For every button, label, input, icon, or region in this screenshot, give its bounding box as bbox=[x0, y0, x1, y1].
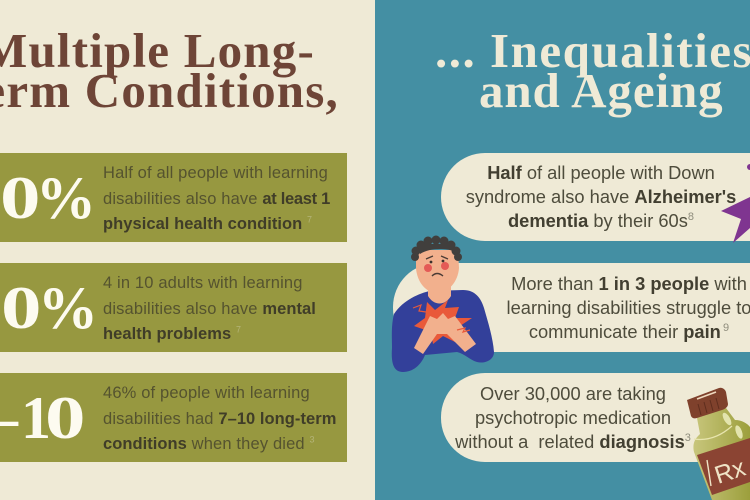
label text Rx: Rx bbox=[711, 453, 749, 490]
heading: inequalities and ageing: and Ageing bbox=[479, 63, 724, 118]
stat number: 40%: % bbox=[38, 275, 98, 341]
panel: inequalities and ageing bbox=[375, 0, 750, 500]
callout text: without a related diagnosis3 bbox=[455, 431, 691, 452]
stat description: disabilities also have mental bbox=[103, 300, 316, 318]
heading: multiple long-term conditions bbox=[0, 23, 339, 118]
head bbox=[416, 250, 459, 293]
callout text: learning disabilities struggle to bbox=[507, 297, 750, 318]
stat number: 7-10 bbox=[0, 385, 86, 451]
stat description bbox=[103, 164, 330, 233]
label bbox=[697, 438, 750, 495]
callout text: Over 30,000 are taking bbox=[480, 383, 666, 404]
panel: multiple long-term conditions bbox=[0, 0, 375, 500]
cap bbox=[687, 388, 728, 418]
stat number: 40% bbox=[0, 275, 98, 341]
icon: person with chest pain bbox=[392, 236, 494, 372]
stat description: conditions when they died 3 bbox=[103, 435, 315, 453]
callout text: Half of all people with Down bbox=[487, 162, 715, 183]
stat description bbox=[103, 274, 316, 343]
bottle body bbox=[693, 408, 750, 500]
curly hair bbox=[411, 236, 462, 261]
stat description: health problems 7 bbox=[103, 325, 241, 343]
stat description: disabilities had 7–10 long-term bbox=[103, 410, 336, 428]
stat number: 50% bbox=[0, 165, 96, 231]
stat number: 40%: 0 bbox=[1, 275, 42, 341]
callout text: psychotropic medication bbox=[475, 407, 671, 428]
stat number: 7-10: 1 bbox=[21, 385, 51, 451]
stat row: half physical health bbox=[0, 153, 347, 242]
stat number: 50%: % bbox=[36, 165, 96, 231]
callout: psychotropic medication bbox=[441, 373, 750, 462]
stat description bbox=[103, 384, 336, 453]
callout text: syndrome also have Alzheimer's bbox=[466, 186, 736, 207]
callout: communicating pain bbox=[393, 263, 750, 352]
stat description: 4 in 10 adults with learning bbox=[103, 274, 303, 292]
face bbox=[424, 264, 432, 272]
stat row: 7-10 long-term conditions bbox=[0, 373, 347, 462]
callout text bbox=[455, 383, 691, 452]
neck bbox=[428, 280, 451, 304]
icon: purple star bbox=[721, 164, 750, 243]
callout: Down syndrome and Alzheimer's bbox=[441, 153, 750, 241]
pain burst bbox=[414, 300, 472, 344]
stat description: 46% of people with learning bbox=[103, 384, 310, 402]
icon: medicine bottle bbox=[687, 388, 750, 500]
stat row: mental health bbox=[0, 263, 347, 352]
callout text: dementia by their 60s8 bbox=[508, 210, 694, 231]
callout text bbox=[466, 162, 736, 231]
stat description: disabilities also have at least 1 bbox=[103, 190, 330, 208]
stat description: Half of all people with learning bbox=[103, 164, 328, 182]
callout text bbox=[507, 273, 750, 342]
callout text: communicate their pain 9 bbox=[529, 321, 729, 342]
hands bbox=[414, 313, 476, 354]
body bbox=[392, 290, 494, 372]
heading: inequalities and ageing: ... Inequalities bbox=[435, 23, 750, 78]
stat number: 50%: 0 bbox=[0, 165, 40, 231]
stat number: 7-10: 0 bbox=[45, 385, 86, 451]
heading: inequalities and ageing bbox=[435, 23, 750, 118]
stat description: physical health condition 7 bbox=[103, 215, 312, 233]
callout text: More than 1 in 3 people with bbox=[511, 273, 747, 294]
